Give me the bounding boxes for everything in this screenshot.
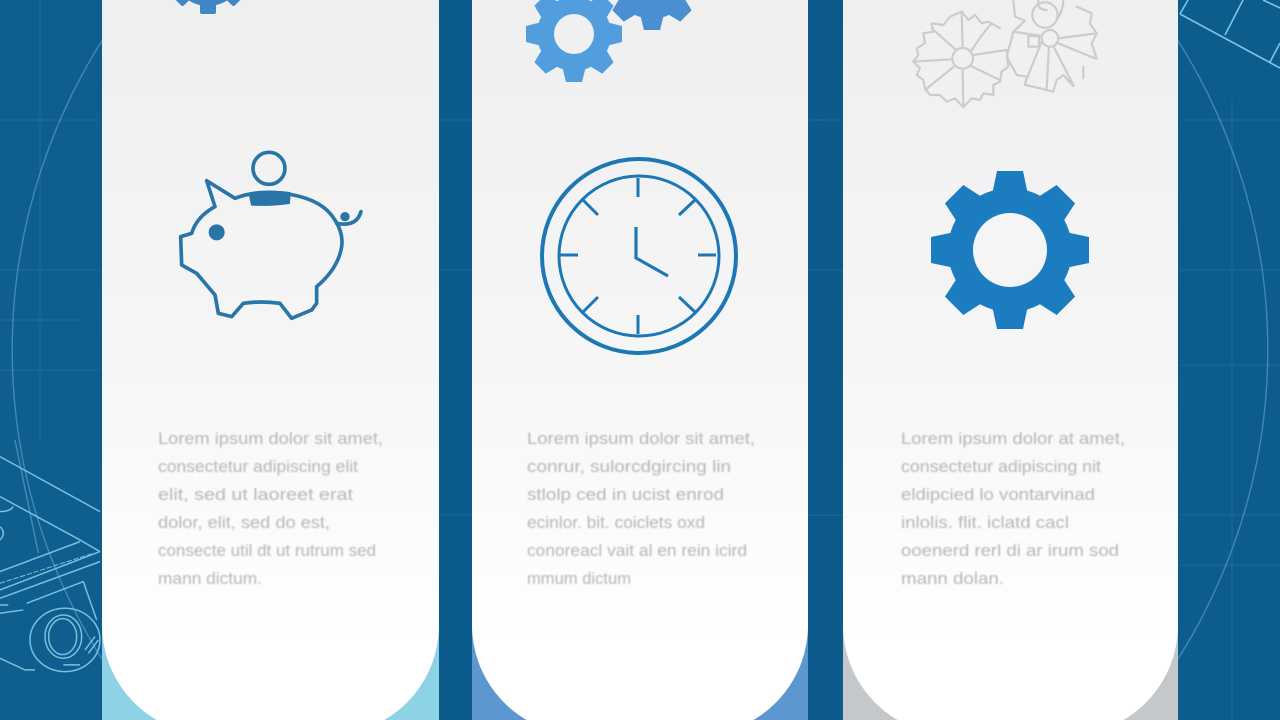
- icon: front gear: [526, 0, 622, 82]
- panel 1: savings: [102, 0, 439, 720]
- panel 1 text: dolor, elit, sed do est,: [158, 513, 330, 532]
- technical drawing: bottom left: [0, 440, 100, 672]
- panel 2 text: Lorem ipsum dolor sit amet,: [527, 429, 755, 448]
- panel 1 text: consecte util dt ut rutrum sed: [158, 541, 376, 560]
- flower left: [913, 12, 1008, 107]
- panel 2 text: stlolp ced in ucist enrod: [527, 485, 724, 504]
- panel 1 text: elit, sed ut laoreet erat: [158, 485, 353, 504]
- panel 2 coloured base: [472, 600, 808, 720]
- panel 2 text: conrur, sulorcdgircing lin: [527, 457, 731, 476]
- panel 2 text: [527, 429, 755, 588]
- icon: clock: [542, 159, 736, 353]
- panel 3: settings: [843, 0, 1178, 720]
- panel 3 text: Lorem ipsum dolor at amet,: [901, 429, 1125, 448]
- panel 1 text: mann dictum.: [158, 569, 262, 588]
- panel 2 text: conoreacl vait al en rein icird: [527, 541, 747, 560]
- icon: partial gear at top: [171, 0, 245, 14]
- panel 2 card: [472, 0, 808, 720]
- icon: large gear: [931, 171, 1089, 329]
- icon: piggy bank: [181, 152, 361, 318]
- panel 2 text: mmum dictum: [527, 569, 631, 588]
- panel 3 text: eldipcied lo vontarvinad: [901, 485, 1095, 504]
- panel 2: time: [472, 0, 808, 720]
- panel 2 text: ecinlor. bit. coiclets oxd: [527, 513, 705, 532]
- panel 3 card: [843, 0, 1178, 720]
- panel 3 text: consectetur adipiscing nit: [901, 457, 1101, 476]
- panel 1 text: Lorem ipsum dolor sit amet,: [158, 429, 383, 448]
- technical drawing: top right: [1180, 0, 1280, 68]
- panel 1 text: [158, 429, 383, 588]
- icon: rear gear: [604, 0, 700, 30]
- panel 1 text: consectetur adipiscing elit: [158, 457, 358, 476]
- flower right: [1007, 0, 1097, 92]
- icon: outlined flowers: [913, 0, 1097, 107]
- panel 3 text: [901, 429, 1125, 588]
- panel 1 card: [102, 0, 439, 720]
- panel 3 text: ooenerd rerl di ar irum sod: [901, 541, 1119, 560]
- panel 3 coloured base: [843, 600, 1178, 720]
- panel 3 text: mann dolan.: [901, 569, 1004, 588]
- panel 3 text: inlolis. flit. iclatd cacl: [901, 513, 1069, 532]
- panel 1 coloured base: [102, 600, 439, 720]
